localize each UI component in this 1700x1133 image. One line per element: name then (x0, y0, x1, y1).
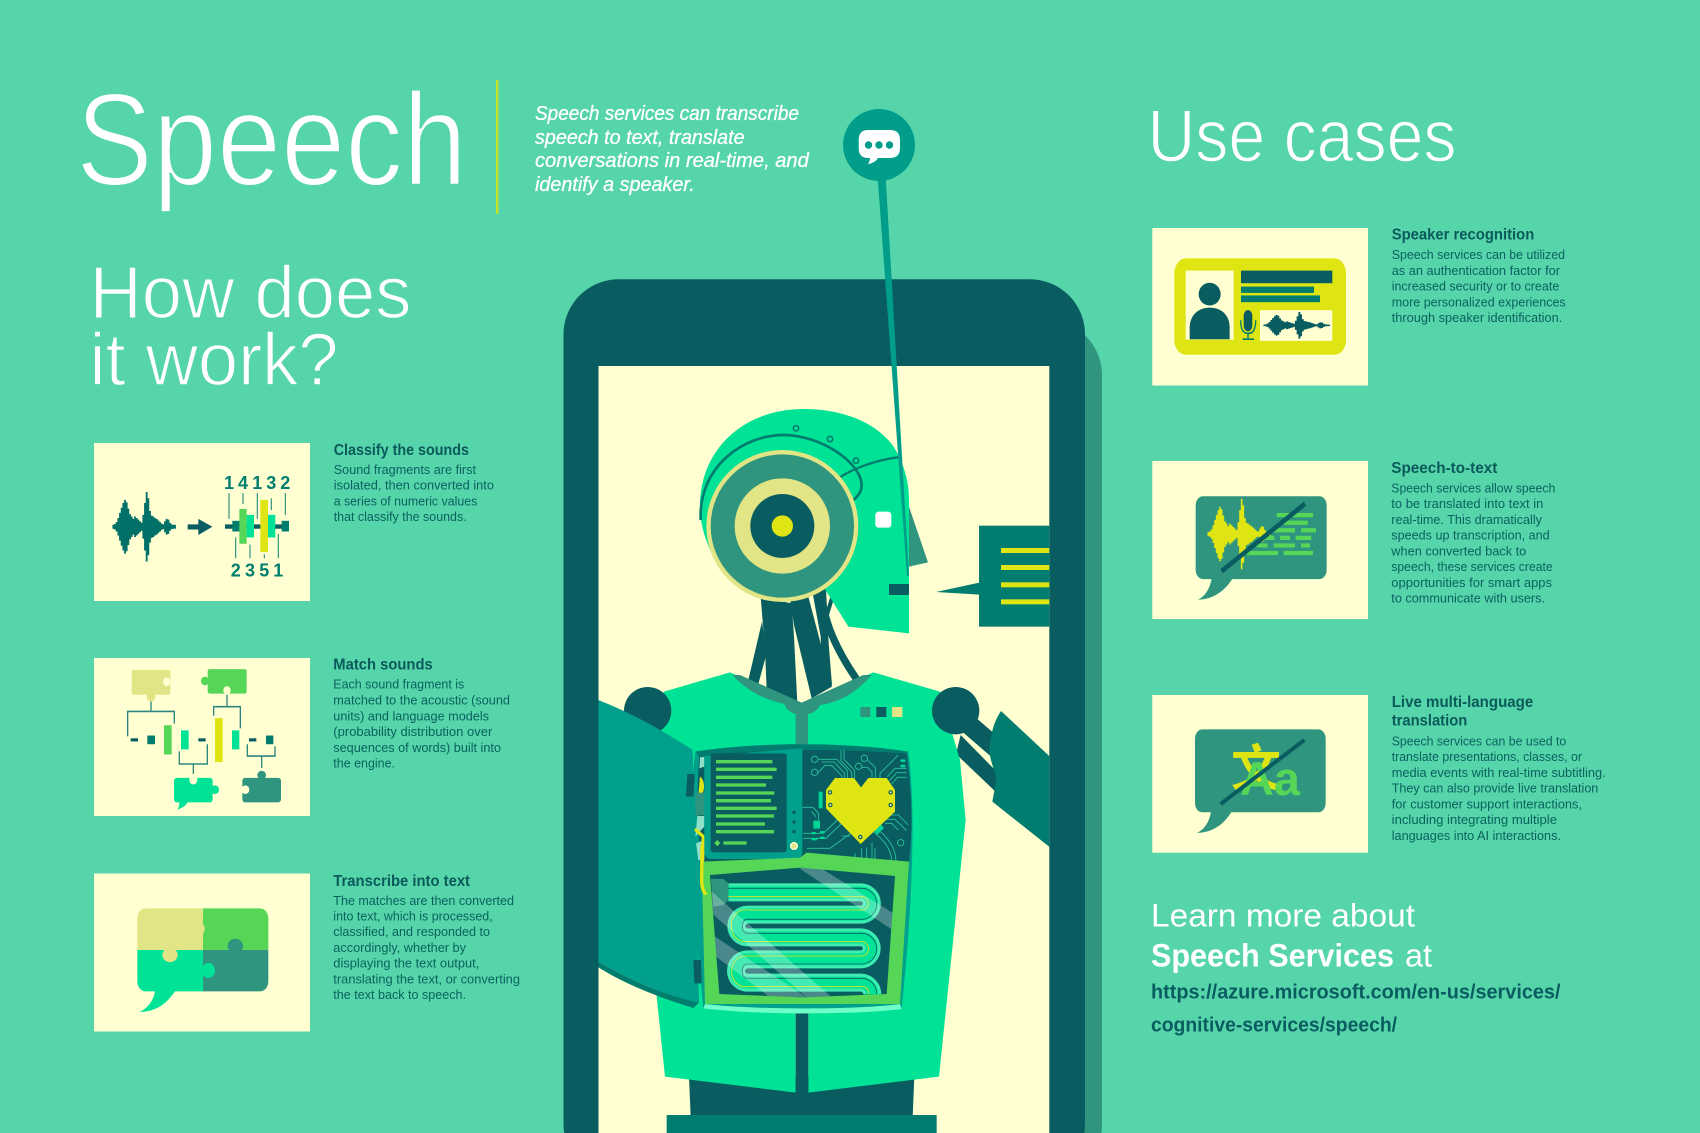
heading: Use cases: Use cases (1148, 95, 1456, 178)
learn more call to action: at (1405, 938, 1432, 974)
text: speaker recognition: Speech services can be utilized (1392, 247, 1565, 262)
text: match sounds: Each sound fragment is (333, 677, 465, 692)
text: transcribe into text: The matches are then converted (333, 893, 514, 908)
text: match sounds: the engine. (333, 756, 395, 771)
intro text (535, 103, 810, 196)
badges (860, 707, 902, 717)
intro text: Speech services can transcribe (535, 103, 799, 125)
left machinery (694, 756, 704, 892)
numbers: 1 (224, 473, 234, 493)
icon: puzzle speech bubble (137, 908, 268, 1012)
glyph: latin letters: Aa (1240, 752, 1301, 805)
text: speaker recognition: as an authentication factor for (1392, 263, 1561, 278)
mouth (889, 584, 909, 595)
text: transcribe into text (333, 873, 520, 1002)
text: speaker recognition: increased security or to create (1392, 278, 1559, 294)
numbers: 5 (259, 561, 269, 581)
lower lip (703, 1004, 902, 1013)
text: speaker recognition: Speaker recognition (1392, 226, 1534, 243)
text: speech-to-text: speech, these services create (1391, 559, 1553, 574)
robot right arm (956, 711, 1050, 847)
text: live multi-language translation: for customer support interactions, (1392, 796, 1582, 811)
numbers: 1 (252, 473, 262, 493)
collar stem (796, 714, 808, 744)
card: speaker recognition icon (1152, 228, 1368, 386)
text: classify the sounds: Sound fragments are first (334, 462, 476, 477)
text: speech-to-text (1390, 460, 1555, 606)
slash (1221, 740, 1304, 804)
text: speaker recognition: more personalized experiences (1392, 294, 1566, 309)
intro text: conversations in real-time, and (535, 150, 810, 172)
heading: How does it work?: it work? (90, 318, 338, 401)
text: match sounds: units) and language models (333, 708, 489, 723)
icon: puzzle pieces with brackets (128, 669, 281, 809)
intro text: speech to text, translate (535, 127, 745, 149)
text: transcribe into text: Transcribe into text (333, 873, 470, 890)
text: transcribe into text: classified, and responded to (333, 924, 490, 939)
intro text: identify a speaker. (535, 174, 695, 196)
card: live translation icon (1152, 695, 1368, 853)
learn more call to action: Learn more about (1151, 898, 1415, 934)
text: speech-to-text: Speech-to-text (1391, 460, 1497, 477)
text: speech-to-text: to be translated into text in (1391, 496, 1543, 511)
card: speech-to-text icon (1152, 461, 1368, 619)
heart (826, 778, 895, 844)
text: speech-to-text: Speech services allow speech (1391, 480, 1555, 495)
circuit traces (802, 750, 908, 862)
text: live multi-language translation: They can also provide live translation (1392, 781, 1598, 796)
text: match sounds: Match sounds (333, 656, 433, 674)
glass reflection (712, 868, 893, 997)
robot illustration (598, 409, 1051, 1133)
text: transcribe into text: accordingly, whether by (333, 940, 466, 955)
text: speaker recognition: through speaker identification. (1392, 310, 1562, 325)
text: transcribe into text: the text back to speech. (333, 987, 466, 1002)
phone body (564, 279, 1085, 1133)
text: speech-to-text: real-time. This dramatically (1391, 512, 1542, 527)
text: transcribe into text: into text, which is processed, (333, 908, 493, 924)
card: match sounds icon (94, 658, 310, 816)
numbers: 2 (231, 561, 241, 581)
icon: speech bubble with wave and text (1196, 496, 1327, 600)
glyph: translated character: 文 (1231, 729, 1281, 801)
text: classify the sounds: isolated, then converted into (334, 478, 494, 493)
text: live multi-language translation: translate presentations, classes, or (1392, 749, 1583, 764)
text: live multi-language translation: media events with real-time subtitling. (1392, 765, 1606, 780)
numbers: 4 (238, 473, 248, 493)
title: Speech: Speech (76, 66, 467, 213)
numbers: 2 (280, 473, 290, 493)
robot torso (624, 672, 979, 1133)
text: speech-to-text: to communicate with users. (1391, 591, 1545, 606)
chest door (598, 700, 702, 1008)
text: match sounds: sequences of words) built into (333, 740, 501, 755)
text: speech-to-text: opportunities for smart apps (1391, 575, 1552, 590)
numbers: 1 (273, 561, 283, 581)
learn more call to action: https://azure.microsoft.com/en-us/services/ (1151, 981, 1561, 1003)
numbers (224, 473, 290, 581)
text: classify the sounds: a series of numeric values (334, 493, 478, 508)
heart rivets (828, 791, 892, 839)
green frame (702, 853, 909, 1004)
speech bubble with lines (936, 526, 1051, 627)
numbers: 3 (266, 473, 276, 493)
text: speech-to-text: when converted back to (1390, 543, 1526, 558)
heading: How does it work? (90, 251, 412, 401)
text: speech-to-text: speeds up transcription, and (1391, 528, 1550, 543)
text: live multi-language translation: translation (1392, 713, 1467, 730)
learn more call to action: Speech Services (1151, 938, 1394, 974)
text: match sounds: matched to the acoustic (sound (333, 692, 510, 708)
learn more call to action: cognitive-services/speech/ (1151, 1015, 1397, 1037)
text: classify the sounds: Classify the sounds (334, 442, 469, 459)
learn more call to action (1151, 898, 1561, 1037)
coiled tube (711, 868, 893, 997)
text: live multi-language translation (1392, 694, 1606, 843)
antenna stem (878, 178, 909, 576)
heading: How does it work?: How does (90, 251, 412, 334)
text: live multi-language translation: including integrating multiple (1392, 812, 1557, 827)
divider (496, 80, 498, 214)
helmet wires (701, 426, 898, 520)
text: classify the sounds (334, 442, 494, 524)
numbers: 3 (245, 561, 255, 581)
circuit chips (811, 759, 905, 840)
robot neck wires (748, 588, 857, 703)
text: transcribe into text: translating the text, or converting (333, 971, 520, 986)
card: transcribe into text icon (94, 874, 310, 1032)
icon: translation bubble shape (1195, 729, 1326, 833)
phone screen (598, 366, 1049, 1133)
icon: sound wave and classified bars (113, 492, 289, 562)
eye (875, 512, 891, 528)
text: speaker recognition (1392, 226, 1566, 325)
robot chest panel (691, 744, 913, 1013)
text: live multi-language translation: Live multi-language (1392, 694, 1534, 711)
text: live multi-language translation: languages into AI interactions. (1392, 828, 1561, 843)
card: classify the sounds icon (94, 443, 310, 601)
screen panel (704, 748, 802, 859)
text: live multi-language translation: Speech services can be used to (1392, 733, 1566, 748)
yellow cable (702, 847, 705, 893)
phone shadow (580, 320, 1102, 1133)
ear target (706, 450, 858, 602)
gut cavity (710, 868, 895, 997)
text: classify the sounds: that classify the sounds. (334, 509, 467, 524)
text: transcribe into text: displaying the text output, (333, 956, 479, 971)
icon: chat badge (843, 109, 915, 181)
text: match sounds (333, 656, 510, 771)
collar (733, 675, 872, 714)
text: match sounds: (probability distribution over (333, 724, 493, 739)
shoulder joints (624, 687, 979, 734)
icon: ID card (1174, 258, 1346, 355)
robot head (700, 409, 1051, 633)
gut valve (711, 879, 728, 907)
